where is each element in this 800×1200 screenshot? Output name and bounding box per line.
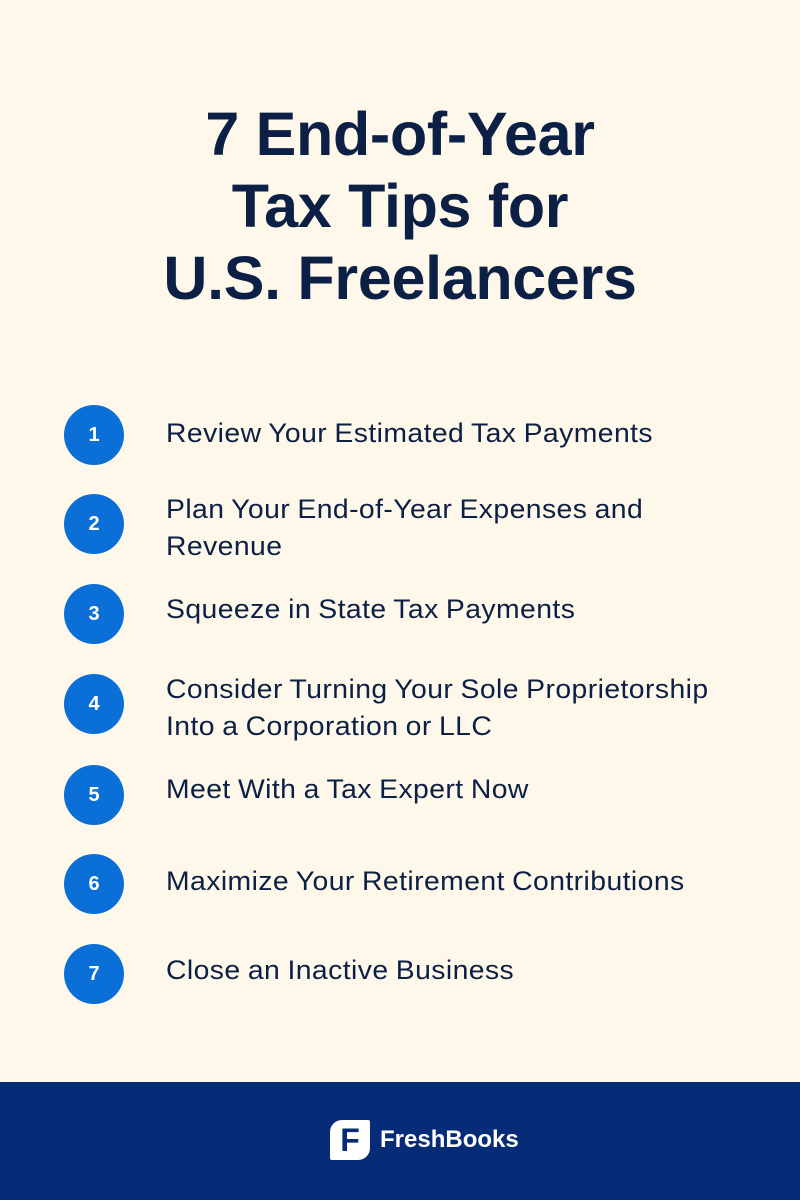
- item 2: 2: [88, 513, 100, 535]
- item 4: 4: [88, 693, 100, 715]
- title: Tax Tips for: [232, 172, 568, 240]
- item 5: Meet With a Tax Expert Now: [166, 774, 529, 804]
- title: [163, 100, 637, 312]
- item 7: Close an Inactive Business: [166, 955, 514, 985]
- brand name: FreshBooks: [380, 1126, 519, 1153]
- item 1: Review Your Estimated Tax Payments: [166, 418, 653, 448]
- item 3: Squeeze in State Tax Payments: [166, 594, 575, 624]
- item 5: 5: [88, 784, 100, 806]
- item 6: [64, 854, 685, 914]
- item 4: [64, 674, 709, 741]
- item 6: Maximize Your Retirement Contributions: [166, 866, 685, 896]
- icon: F leaf: [330, 1120, 370, 1160]
- item 3: 3: [88, 603, 100, 625]
- item 2: Revenue: [166, 531, 282, 561]
- item 5: [64, 765, 529, 825]
- item 1: 1: [88, 424, 100, 446]
- item 3: [64, 584, 575, 644]
- title: U.S. Freelancers: [163, 244, 637, 312]
- icon: F leaf: F: [340, 1122, 360, 1158]
- item 7: 7: [88, 963, 100, 985]
- item 7: [64, 944, 514, 1004]
- item 1: [64, 405, 653, 465]
- footer: [0, 1082, 800, 1200]
- title: 7 End-of-Year: [205, 100, 595, 168]
- item 4: Consider Turning Your Sole Proprietorship: [166, 674, 709, 704]
- item 6: 6: [88, 873, 100, 895]
- item 2: [64, 494, 643, 561]
- logo: [330, 1120, 519, 1160]
- item 2: Plan Your End-of-Year Expenses and: [166, 494, 643, 524]
- item 4: Into a Corporation or LLC: [166, 711, 492, 741]
